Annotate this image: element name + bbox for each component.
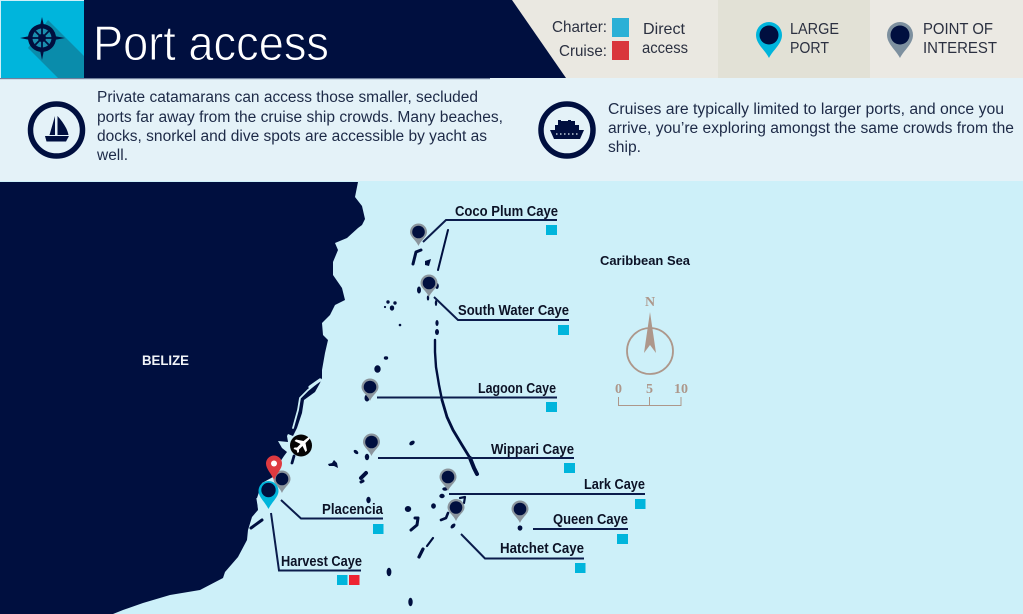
legend: large port: LARGE bbox=[790, 21, 839, 38]
location: Hatchet Caye bbox=[448, 499, 586, 573]
text block: cruise: Cruises are typically limited to larger ports, and once you bbox=[608, 101, 1004, 118]
location: South Water Caye bbox=[420, 274, 569, 335]
legend: point of interest: INTEREST bbox=[923, 40, 997, 57]
legend: direct access key: Charter: bbox=[552, 19, 607, 36]
location: Placencia bbox=[274, 470, 384, 534]
location: Harvest Caye bbox=[258, 481, 362, 585]
map label: Belize: BELIZE bbox=[142, 352, 189, 368]
text block: charter: Private catamarans can access those smaller, secluded bbox=[97, 89, 478, 106]
text block: charter bbox=[96, 89, 503, 164]
text block: charter: docks, snorkel and dive spots are accessible by yacht as bbox=[97, 128, 487, 145]
text block: cruise: arrive, you’re exploring amongst the same crowds from the bbox=[608, 120, 1014, 137]
legend: large port: PORT bbox=[790, 40, 829, 57]
title: Port access bbox=[93, 17, 329, 71]
map: islands and reef bbox=[251, 230, 522, 606]
compass and scale: 10 bbox=[674, 382, 688, 397]
icon: red location pin bbox=[266, 456, 282, 480]
header banner bbox=[84, 0, 566, 78]
legend: direct access key bbox=[552, 18, 688, 60]
icon: cruise ship bbox=[541, 104, 593, 156]
location: Lagoon Caye bbox=[362, 378, 557, 412]
location: Lagoon Caye: Lagoon Caye bbox=[478, 381, 556, 397]
map label: Caribbean Sea: Caribbean Sea bbox=[600, 253, 691, 268]
legend: large port bbox=[756, 21, 839, 58]
panel: legend band bbox=[500, 0, 1023, 78]
legend: point of interest bbox=[887, 21, 997, 58]
info strip background bbox=[0, 78, 1023, 181]
location: Queen Caye bbox=[512, 500, 628, 544]
location: South Water Caye: South Water Caye bbox=[458, 303, 569, 319]
location: Hatchet Caye: Hatchet Caye bbox=[500, 541, 584, 557]
map: mainland Belize bbox=[0, 182, 365, 614]
location: Lark Caye bbox=[440, 469, 646, 509]
location: Wippari Caye: Wippari Caye bbox=[491, 442, 574, 458]
compass and scale: N bbox=[645, 295, 655, 310]
icon: airport bbox=[290, 434, 312, 456]
compass and scale bbox=[615, 295, 688, 406]
location: Harvest Caye: Harvest Caye bbox=[281, 554, 362, 570]
icon: sailboat bbox=[30, 104, 82, 156]
text block: charter: ports far away from the cruise ship crowds. Many beaches, bbox=[97, 109, 503, 126]
legend: point of interest: POINT OF bbox=[923, 21, 993, 38]
panel: header icon tile bbox=[1, 1, 84, 78]
legend: direct access key: access bbox=[642, 40, 688, 57]
location: Placencia: Placencia bbox=[322, 502, 384, 518]
location: Queen Caye: Queen Caye bbox=[553, 512, 628, 528]
location: Coco Plum Caye: Coco Plum Caye bbox=[455, 204, 558, 220]
location: Lark Caye: Lark Caye bbox=[584, 477, 645, 493]
legend: direct access key: Direct bbox=[643, 21, 686, 38]
text block: cruise: ship. bbox=[608, 139, 641, 156]
location: Wippari Caye bbox=[363, 434, 575, 473]
text block: charter: well. bbox=[96, 147, 128, 164]
legend: direct access key: Cruise: bbox=[559, 43, 607, 60]
location: Coco Plum Caye bbox=[410, 204, 558, 246]
text block: cruise bbox=[608, 101, 1014, 156]
compass and scale: 5 bbox=[646, 382, 653, 397]
compass and scale: 0 bbox=[615, 382, 622, 397]
